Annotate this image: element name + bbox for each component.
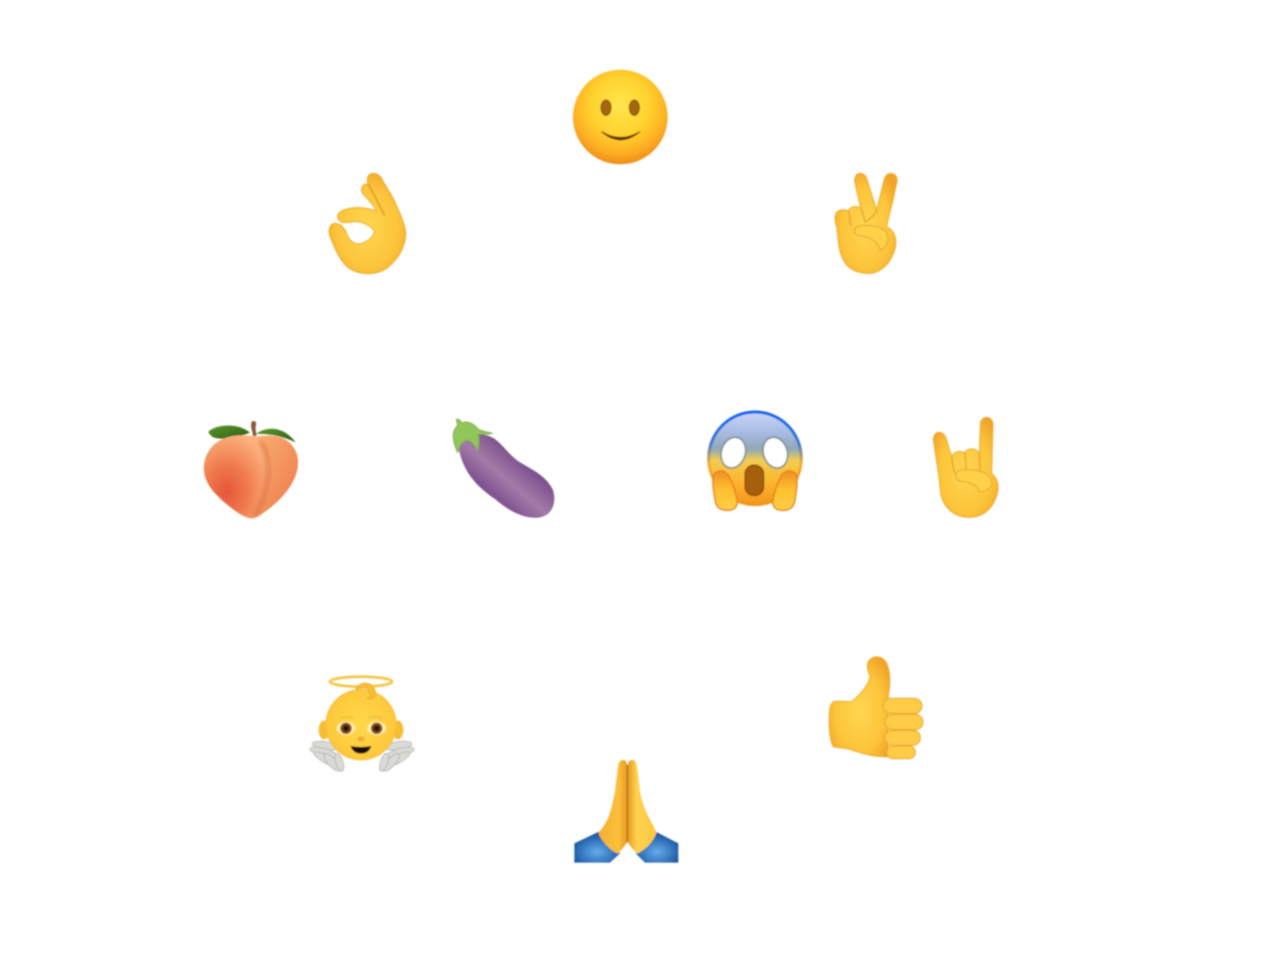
icon: victory hand	[835, 173, 897, 273]
icon: face screaming in fear	[709, 412, 801, 510]
icon: slightly smiling face	[573, 70, 668, 164]
right wing	[378, 740, 415, 773]
icon: sign of the horns	[933, 417, 998, 517]
icon: folded hands	[574, 760, 678, 863]
icon: OK hand	[329, 173, 406, 274]
icon: baby angel	[309, 677, 415, 773]
icon: aubergine	[453, 419, 554, 518]
icon: thumbs up	[829, 657, 923, 759]
icon: peach	[204, 421, 298, 518]
left wing	[309, 740, 346, 773]
